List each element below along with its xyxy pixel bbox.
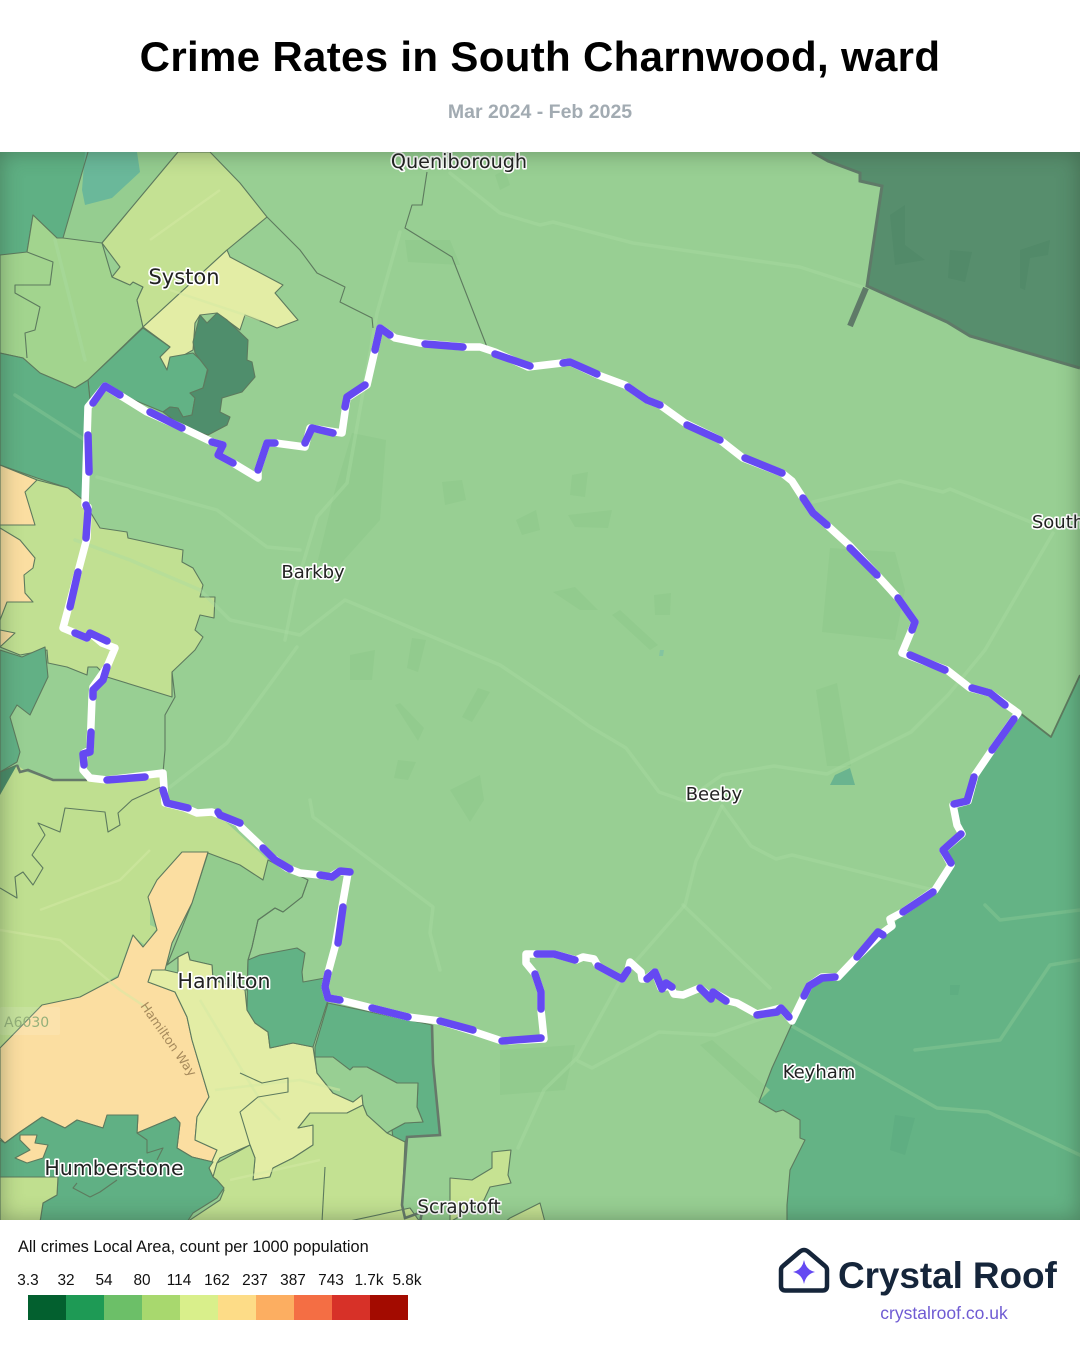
ward outlines outside the route xyxy=(0,152,1080,1222)
website url: crystalroof.co.uk xyxy=(880,1303,1008,1323)
area: Scraptoft yellow-green patches xyxy=(345,1150,545,1222)
place labels: Syston xyxy=(148,265,220,289)
area: south-west yellow-green xyxy=(0,765,268,1047)
legend: 743 xyxy=(318,1272,344,1289)
area: Hamilton mid green xyxy=(247,948,328,1048)
place labels: Humberstone xyxy=(44,1156,184,1180)
place labels: Scraptoft xyxy=(417,1197,501,1218)
logo: Crystal Roof xyxy=(778,1248,1057,1323)
legend: 3.3 xyxy=(17,1272,39,1289)
ward boundary route: white base with purple dashes xyxy=(63,328,1018,1041)
choropleth map xyxy=(0,152,1080,1220)
area: west dark green strip xyxy=(0,647,48,795)
legend: 80 xyxy=(133,1272,151,1289)
area: east of Hamilton mid green xyxy=(315,1003,440,1142)
area: Hamilton north green xyxy=(167,853,308,990)
legend colour bar xyxy=(28,1295,408,1320)
area: small orange in Humberstone xyxy=(15,1135,48,1163)
title: Crime Rates in South Charnwood, ward xyxy=(140,33,940,80)
area: Syston north yellow-green xyxy=(102,152,267,327)
area: south yellow-green xyxy=(187,1105,405,1222)
darker field patches xyxy=(318,170,1050,1155)
legend title: All crimes Local Area, count per 1000 population xyxy=(18,1238,369,1256)
legend scale values xyxy=(17,1272,422,1289)
area: west mid green xyxy=(0,353,90,500)
area: Hamilton light yellow xyxy=(148,952,363,1180)
area: dark green blob xyxy=(163,313,255,435)
legend: 5.8k xyxy=(392,1272,422,1289)
area: far south-west yellow-green xyxy=(0,1177,58,1222)
road label box: A6030: A6030 xyxy=(4,1015,49,1031)
map edge vignette xyxy=(0,152,1080,1220)
legend: 237 xyxy=(242,1272,268,1289)
legend: 32 xyxy=(57,1272,75,1289)
wordmark: Crystal Roof xyxy=(838,1255,1057,1296)
area: Syston south mid green xyxy=(88,328,208,417)
area: north-east dark green xyxy=(812,152,1080,368)
area: west lighter green xyxy=(0,215,143,388)
subtitle: date range: Mar 2024 - Feb 2025 xyxy=(448,101,632,123)
place labels xyxy=(44,150,1080,1218)
legend: 387 xyxy=(280,1272,306,1289)
area: south-east mid green xyxy=(759,675,1080,1222)
place labels: Hamilton xyxy=(178,969,270,993)
road label box: A6030 xyxy=(0,1007,60,1035)
area: Syston light yellow xyxy=(143,250,298,370)
legend: 1.7k xyxy=(354,1272,384,1289)
place labels: Barkby xyxy=(281,562,345,583)
area: west orange patches xyxy=(0,465,37,647)
pale road network xyxy=(0,173,1080,1180)
icon: house with star xyxy=(778,1248,830,1293)
legend: 114 xyxy=(167,1272,191,1289)
area: Humberstone mid green xyxy=(0,1115,224,1222)
area: west yellow-green xyxy=(0,465,215,697)
area: north-west dark green xyxy=(0,152,178,255)
place labels: Beeby xyxy=(686,784,743,805)
place labels: Keyham xyxy=(783,1062,855,1083)
legend: 162 xyxy=(204,1272,230,1289)
road label: Hamilton Way: Hamilton Way xyxy=(138,999,200,1080)
area: Hamilton large orange xyxy=(0,852,217,1162)
legend: 54 xyxy=(95,1272,113,1289)
legend xyxy=(17,1238,422,1320)
area: light green pocket xyxy=(315,1057,423,1133)
